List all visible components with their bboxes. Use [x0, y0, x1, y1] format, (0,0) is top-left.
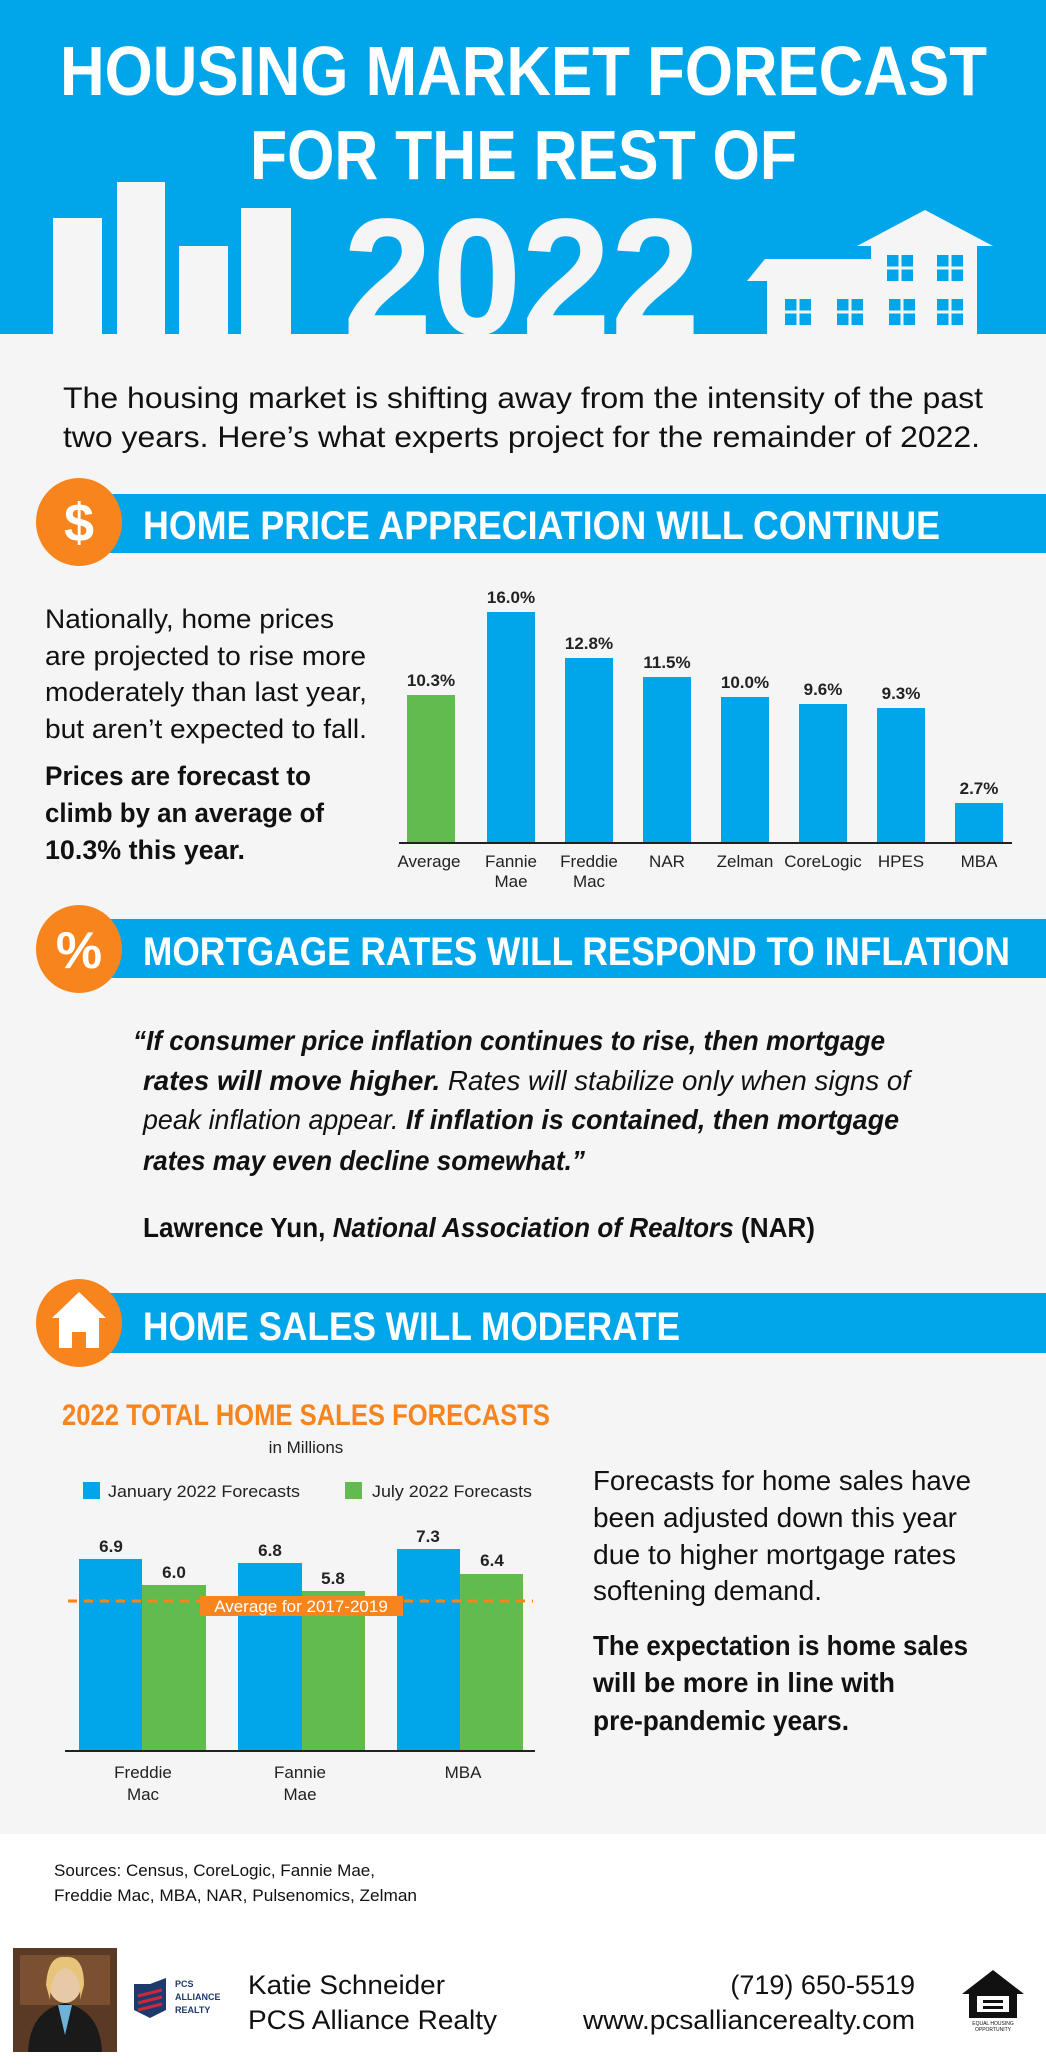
legend [83, 1482, 532, 1501]
icon: dollar: $ [64, 493, 94, 553]
text block: sales description: been adjusted down this year [593, 1502, 957, 1533]
footer background [0, 1834, 1046, 2065]
text block: sales description: will be more in line with [592, 1667, 895, 1698]
bar chart: home sales: Mae [283, 1785, 317, 1804]
bar chart: home sales: 6.9 [99, 1537, 123, 1556]
bar chart: price forecasts: Freddie [560, 852, 618, 871]
title line 2: FOR THE REST OF [250, 116, 797, 194]
quote [133, 1025, 913, 1176]
text block: price description [45, 604, 367, 865]
quote: rates may even decline somewhat.” [143, 1145, 585, 1176]
bar chart: home sales: Mac [127, 1785, 160, 1804]
bar chart: home sales: MBA [445, 1763, 482, 1782]
section header: home price appreciation: HOME PRICE APPRECIATION WILL CONTINUE [143, 504, 940, 548]
icon: house [52, 1292, 106, 1348]
chart subtitle: in Millions [269, 1438, 343, 1457]
text block: price description: Prices are forecast to [45, 761, 311, 791]
bar chart: price forecasts: Zelman [717, 852, 773, 871]
contact info: (719) 650-5519 [730, 1970, 915, 2000]
intro text [63, 382, 984, 454]
bar chart: price forecasts: 10.0% [721, 673, 769, 692]
bar chart: price forecasts: 12.8% [565, 634, 613, 653]
sources: Freddie Mac, MBA, NAR, Pulsenomics, Zelman [54, 1886, 417, 1905]
icon: house [747, 210, 993, 335]
bar chart: price forecasts: 10.3% [407, 671, 455, 690]
text block: price description: but aren’t expected to fall. [45, 714, 367, 744]
bar chart: home sales: 6.0 [162, 1563, 186, 1582]
bar chart: home sales: 7.3 [416, 1527, 440, 1546]
agent name: PCS Alliance Realty [248, 2005, 498, 2035]
intro text: two years. Here’s what experts project for the remainder of 2022. [63, 421, 980, 454]
bar chart: price forecasts: Mac [573, 872, 606, 891]
bar chart: price forecasts: 11.5% [643, 653, 691, 672]
contact info [582, 1970, 915, 2035]
bar chart: price forecasts [397, 588, 1012, 891]
text block: sales description: pre-pandemic years. [593, 1705, 849, 1736]
header banner [0, 0, 1046, 334]
sources: Sources: Census, CoreLogic, Fannie Mae, [54, 1861, 375, 1880]
bar chart: price forecasts: NAR [649, 852, 685, 871]
text block: price description: Nationally, home prices [45, 604, 334, 634]
company logo [134, 1978, 220, 2018]
quote attribution: Lawrence Yun, National Association of Realtors (NAR) [143, 1212, 815, 1243]
sources [54, 1861, 417, 1905]
text block: sales description: Forecasts for home sales have [593, 1465, 971, 1496]
icon: percent: % [56, 922, 102, 980]
text block: price description: are projected to rise more [45, 641, 366, 671]
icon: skyline bars [53, 182, 291, 335]
legend: July 2022 Forecasts [372, 1482, 532, 1501]
icon: equal housing: OPPORTUNITY [975, 2027, 1012, 2033]
section header: mortgage rates [36, 905, 1046, 993]
bar chart: home sales: Freddie [114, 1763, 172, 1782]
text block: sales description: The expectation is home sales [593, 1630, 968, 1661]
bar chart: price forecasts: 9.6% [804, 680, 842, 699]
text block: price description: climb by an average of [45, 798, 325, 828]
title year 2022: 2022 [343, 185, 700, 370]
contact info: www.pcsalliancerealty.com [582, 2005, 915, 2035]
bar chart: home sales: 5.8 [321, 1569, 345, 1588]
section header: home sales [36, 1279, 1046, 1367]
section header: home sales: HOME SALES WILL MODERATE [143, 1305, 680, 1349]
agent name [248, 1970, 498, 2035]
text block: sales description [592, 1465, 971, 1736]
bar chart: home sales: Average for 2017-2019 [214, 1597, 388, 1616]
quote: rates will move higher. Rates will stabilize only when signs of [143, 1065, 913, 1096]
quote: “If consumer price inflation continues to rise, then mortgage [133, 1025, 885, 1056]
section header: home price appreciation [36, 478, 1046, 566]
chart title: 2022 TOTAL HOME SALES FORECASTS [62, 1399, 550, 1432]
company logo: PCS [175, 1979, 194, 1989]
company logo: REALTY [175, 2005, 210, 2015]
bar chart: price forecasts: CoreLogic [784, 852, 862, 871]
agent photo [13, 1948, 117, 2052]
icon: equal housing [962, 1970, 1024, 2033]
bar chart: price forecasts: MBA [961, 852, 998, 871]
quote: peak inflation appear. If inflation is contained, then mortgage [142, 1104, 899, 1135]
intro text: The housing market is shifting away from the intensity of the past [63, 382, 984, 415]
bar chart: price forecasts: Mae [494, 872, 528, 891]
text block: sales description: due to higher mortgage rates [593, 1539, 956, 1570]
bar chart: home sales: 6.4 [480, 1551, 504, 1570]
bar chart: price forecasts: Average [397, 852, 461, 871]
agent name: Katie Schneider [248, 1970, 445, 2000]
bar chart: price forecasts: 2.7% [960, 779, 998, 798]
bar chart: price forecasts: HPES [878, 852, 924, 871]
legend: January 2022 Forecasts [108, 1482, 300, 1501]
bar chart: price forecasts: 9.3% [882, 684, 920, 703]
bar chart: price forecasts: 16.0% [487, 588, 535, 607]
icon: equal housing: EQUAL HOUSING [972, 2021, 1014, 2027]
bar chart: home sales: Fannie [274, 1763, 326, 1782]
bar chart: price forecasts: Fannie [485, 852, 537, 871]
company logo: ALLIANCE [175, 1992, 220, 2002]
bar chart: home sales: 6.8 [258, 1541, 282, 1560]
bar chart: home sales [65, 1527, 535, 1804]
text block: price description: moderately than last year, [45, 677, 367, 707]
text block: price description: 10.3% this year. [45, 835, 245, 865]
text block: sales description: softening demand. [593, 1575, 822, 1606]
